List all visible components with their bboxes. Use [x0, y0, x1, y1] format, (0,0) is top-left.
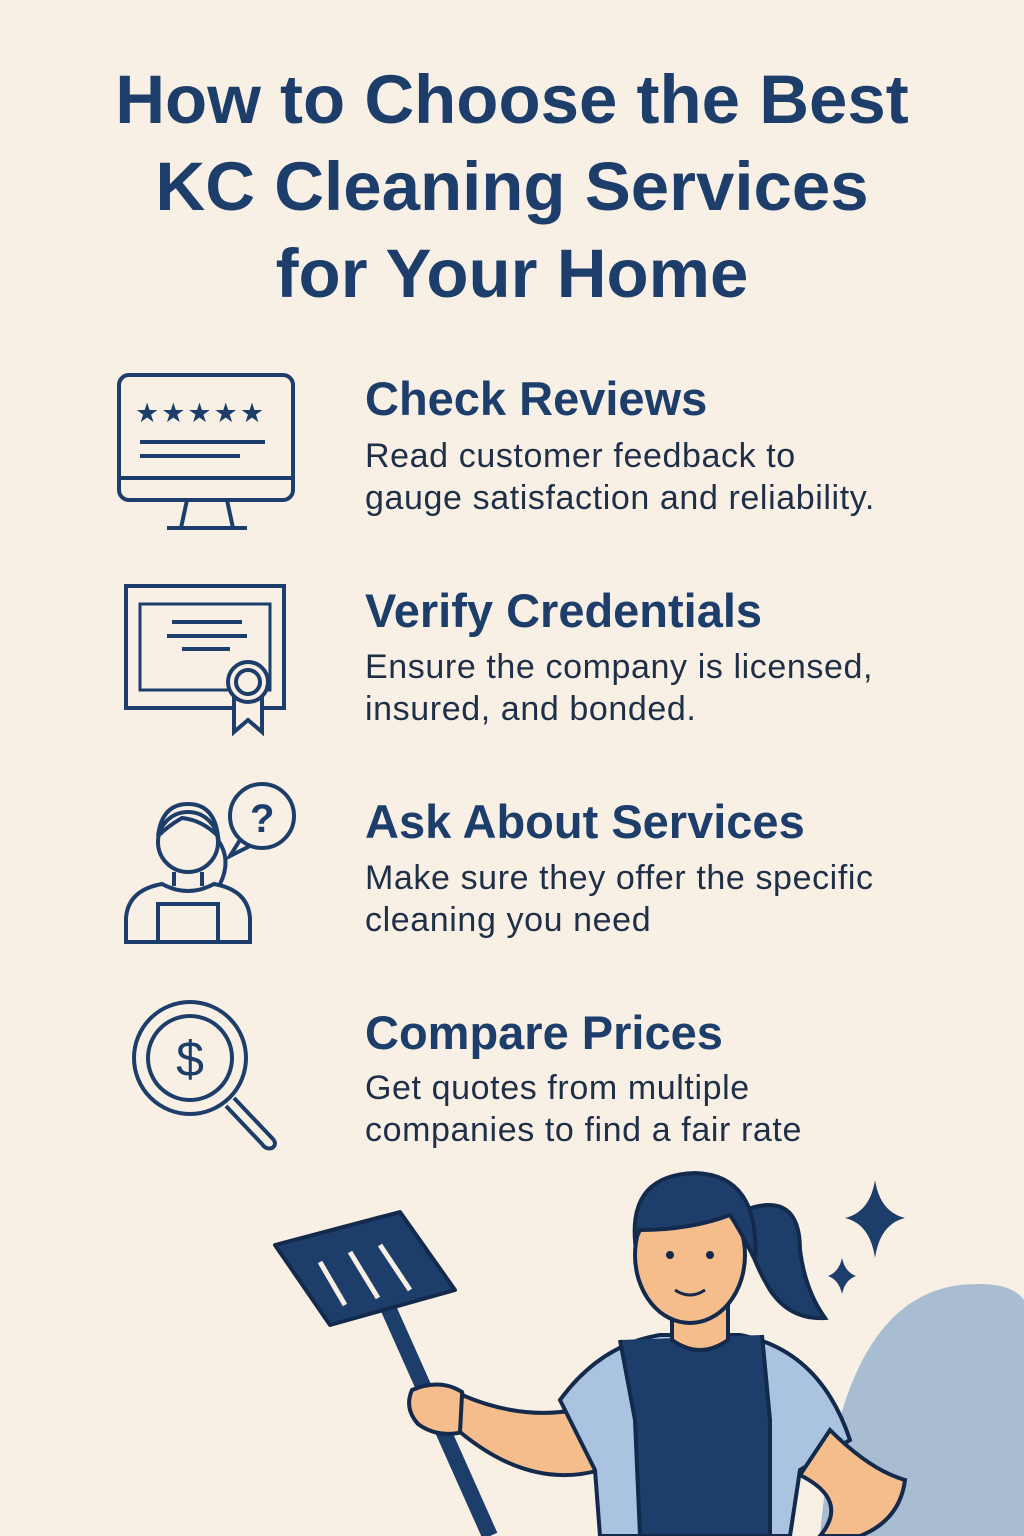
- icon: monitor with stars: [117, 373, 295, 530]
- icon: certificate: [124, 584, 286, 736]
- text: ask about services: Make sure they offer the specific: [365, 859, 874, 897]
- text: compare prices: Get quotes from multiple: [365, 1069, 750, 1107]
- title: How to Choose the Best: [115, 61, 909, 138]
- background hill: [820, 1284, 1024, 1536]
- sparkles: [845, 1180, 905, 1258]
- text: check reviews: gauge satisfaction and reliability.: [365, 479, 875, 517]
- title: [115, 61, 909, 312]
- icon: monitor with stars: ★★★★★: [135, 398, 266, 429]
- title: KC Cleaning Services: [155, 148, 869, 225]
- text: check reviews: [365, 437, 875, 517]
- face: [635, 1187, 745, 1323]
- squeegee head: [275, 1212, 455, 1325]
- illustration: cleaning woman with squeegee: [272, 1171, 1024, 1536]
- text: ask about services: [365, 859, 874, 939]
- title: for Your Home: [276, 235, 748, 312]
- text: verify credentials: insured, and bonded.: [365, 690, 696, 728]
- icon: magnifier dollar: $: [176, 1031, 204, 1087]
- text: ask about services: cleaning you need: [365, 901, 651, 939]
- heading: compare prices: Compare Prices: [365, 1006, 723, 1059]
- hair: [635, 1173, 755, 1260]
- ponytail: [745, 1205, 825, 1318]
- heading: check reviews: Check Reviews: [365, 372, 707, 425]
- arm: [460, 1395, 600, 1475]
- pole: [378, 1285, 490, 1536]
- text: verify credentials: Ensure the company is licensed,: [365, 648, 873, 686]
- text: compare prices: companies to find a fair rate: [365, 1111, 802, 1149]
- icon: person with question: [124, 782, 296, 944]
- body shirt: [560, 1335, 850, 1536]
- apron: [620, 1335, 770, 1536]
- icon: person with question: ?: [250, 797, 274, 841]
- neck: [672, 1300, 728, 1350]
- text: verify credentials: [365, 648, 873, 728]
- heading: verify credentials: Verify Credentials: [365, 584, 762, 637]
- icon: magnifier dollar: [132, 1000, 277, 1150]
- text: compare prices: [365, 1069, 802, 1149]
- hand: [409, 1384, 470, 1434]
- text: check reviews: Read customer feedback to: [365, 437, 796, 475]
- right arm: [800, 1430, 905, 1536]
- heading: ask about services: Ask About Services: [365, 795, 805, 848]
